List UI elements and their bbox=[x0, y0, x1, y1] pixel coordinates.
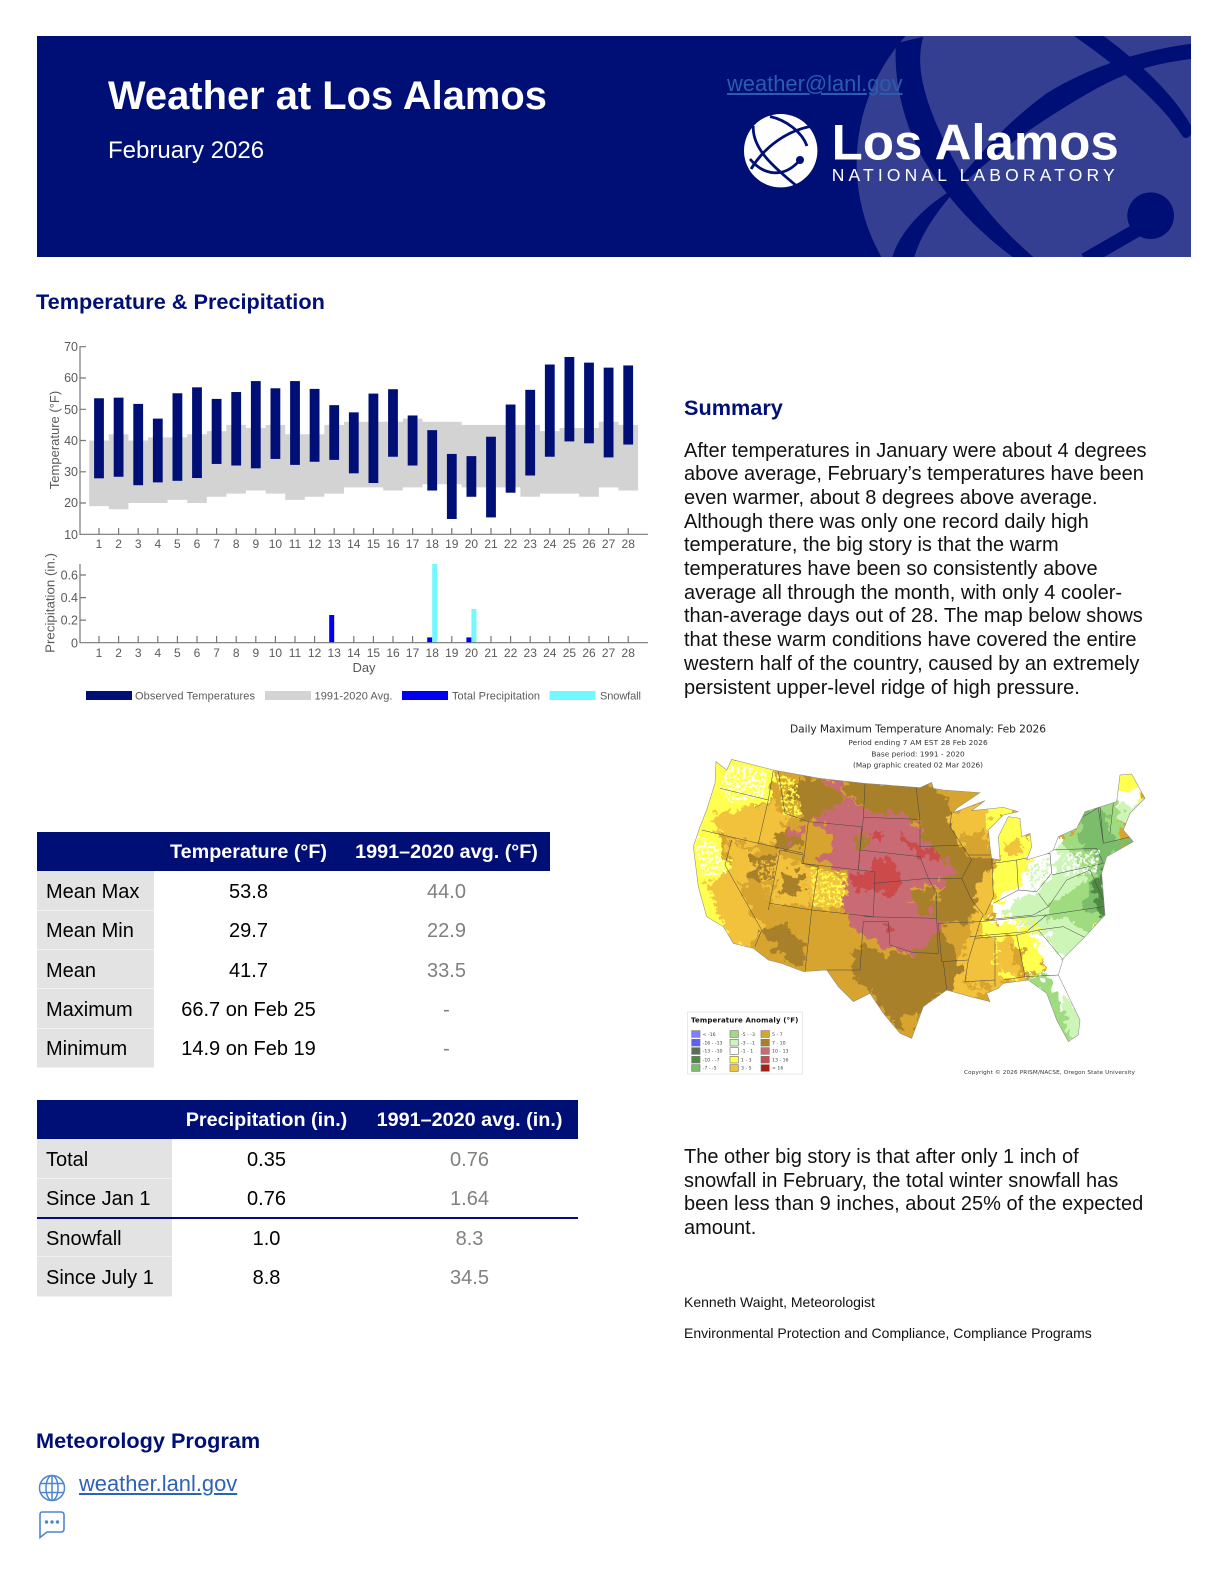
summary paragraph: than-average days out of 28. The map below shows bbox=[684, 605, 1143, 627]
banner background atom pattern bbox=[856, 36, 1191, 257]
chart legend: Observed Temperatures bbox=[135, 690, 256, 702]
icon: chat bubble bbox=[39, 1511, 65, 1539]
precipitation panel bbox=[42, 553, 648, 675]
summary paragraph: temperature, the big story is that the warm bbox=[684, 534, 1059, 556]
precipitation x labels: 15 bbox=[367, 646, 380, 660]
precipitation x labels: 16 bbox=[386, 646, 400, 660]
temperature x labels: 17 bbox=[406, 537, 420, 551]
table: precipitation statistics: 1.64 bbox=[450, 1188, 489, 1210]
precipitation x labels: 20 bbox=[465, 646, 478, 660]
state boundaries bbox=[702, 770, 1132, 990]
temperature x labels: 19 bbox=[445, 537, 459, 551]
temperature x labels: 25 bbox=[563, 537, 576, 551]
temperature x labels: 5 bbox=[174, 537, 181, 551]
precipitation y labels bbox=[61, 568, 78, 650]
map title: Daily Maximum Temperature Anomaly: Feb 2026 bbox=[790, 723, 1046, 736]
summary paragraph: western half of the country, caused by an extremely bbox=[684, 653, 1139, 675]
logo: Los Alamos National Laboratory bbox=[744, 114, 1119, 188]
table: temperature statistics: 22.9 bbox=[427, 920, 466, 942]
precipitation x labels: 6 bbox=[194, 646, 201, 660]
temperature x labels: 6 bbox=[194, 537, 201, 551]
table: precipitation statistics: Total bbox=[46, 1149, 88, 1171]
precipitation axes bbox=[80, 564, 648, 643]
precipitation x labels: 11 bbox=[289, 646, 302, 660]
precipitation x labels: 19 bbox=[445, 646, 459, 660]
table: temperature statistics: Mean bbox=[46, 960, 96, 982]
map legend: -16 - -13 bbox=[703, 1040, 723, 1046]
summary paragraph: even warmer, about 8 degrees above average. bbox=[684, 487, 1098, 509]
table: precipitation statistics: 1991–2020 avg. (in.) bbox=[377, 1109, 562, 1131]
precipitation x labels: 28 bbox=[622, 646, 635, 660]
summary paragraph: Although there was only one record daily high bbox=[684, 511, 1089, 533]
map legend: -10 - -7 bbox=[703, 1057, 720, 1063]
table: precipitation statistics: 0.35 bbox=[247, 1149, 286, 1171]
temperature x labels bbox=[96, 537, 635, 551]
chart legend bbox=[86, 690, 641, 702]
table: precipitation statistics: Snowfall bbox=[46, 1228, 122, 1250]
temperature x labels: 10 bbox=[269, 537, 282, 551]
summary paragraph: that these warm conditions have covered the entire bbox=[684, 629, 1136, 651]
temperature x labels: 27 bbox=[602, 537, 616, 551]
table: temperature statistics: Maximum bbox=[46, 999, 133, 1021]
temperature x labels: 2 bbox=[115, 537, 122, 551]
temperature x labels: 9 bbox=[252, 537, 259, 551]
map subtitle bbox=[848, 738, 988, 769]
logo subtitle: NATIONAL LABORATORY bbox=[832, 165, 1115, 185]
table: temperature statistics bbox=[37, 832, 550, 1068]
heading: temperature and precipitation: Temperature & Precipitation bbox=[36, 289, 325, 314]
temperature x labels: 24 bbox=[543, 537, 557, 551]
map subtitle: (Map graphic created 02 Mar 2026) bbox=[853, 760, 983, 769]
chart legend: Total Precipitation bbox=[452, 690, 540, 702]
map legend: 10 - 13 bbox=[772, 1049, 789, 1055]
temperature x labels: 16 bbox=[386, 537, 400, 551]
map legend: 7 - 10 bbox=[772, 1040, 786, 1046]
table: precipitation statistics: Since July 1 bbox=[46, 1267, 154, 1289]
map legend bbox=[687, 1012, 802, 1074]
temperature x labels: 15 bbox=[367, 537, 380, 551]
table: temperature statistics: Temperature (°F) bbox=[170, 841, 327, 863]
map legend: 13 - 16 bbox=[772, 1057, 789, 1063]
precipitation x labels: 13 bbox=[328, 646, 341, 660]
precipitation x labels: 24 bbox=[543, 646, 557, 660]
table: precipitation statistics: 0.76 bbox=[247, 1188, 286, 1210]
temperature y labels: 30 bbox=[64, 465, 78, 479]
average temperature band bbox=[89, 419, 638, 509]
map legend: > 16 bbox=[772, 1066, 783, 1072]
table: temperature statistics: - bbox=[443, 999, 450, 1021]
table: temperature statistics: Minimum bbox=[46, 1038, 127, 1060]
temperature x labels: 11 bbox=[289, 537, 302, 551]
temperature y labels: 50 bbox=[64, 403, 78, 417]
temperature x labels: 21 bbox=[484, 537, 498, 551]
temperature x labels: 14 bbox=[347, 537, 361, 551]
snowfall paragraph: amount. bbox=[684, 1217, 756, 1239]
summary paragraph: After temperatures in January were about 4 degrees bbox=[684, 440, 1146, 462]
temperature y labels bbox=[64, 340, 78, 542]
map legend: -1 - 1 bbox=[741, 1049, 753, 1055]
map: daily maximum temperature anomaly bbox=[687, 723, 1146, 1076]
snowfall paragraph: been less than 9 inches, about 25% of the expected bbox=[684, 1193, 1143, 1215]
map legend: 3 - 5 bbox=[741, 1066, 752, 1072]
precipitation x labels: 18 bbox=[426, 646, 439, 660]
heading: meteorology program: Meteorology Program bbox=[36, 1428, 260, 1452]
subtitle date: February 2026 bbox=[108, 137, 264, 164]
precipitation x labels: 21 bbox=[484, 646, 498, 660]
precipitation x labels: 26 bbox=[582, 646, 596, 660]
map copyright: Copyright © 2026 PRISM/NACSE, Oregon State University bbox=[964, 1069, 1136, 1076]
precipitation x labels: 23 bbox=[524, 646, 537, 660]
chart legend: Snowfall bbox=[600, 690, 641, 702]
temperature y labels: 60 bbox=[64, 371, 78, 385]
summary paragraph bbox=[684, 440, 1146, 699]
temperature y labels: 10 bbox=[64, 528, 78, 542]
total precipitation bars bbox=[329, 615, 471, 643]
table: precipitation statistics: 1.0 bbox=[253, 1228, 280, 1250]
heading: summary: Summary bbox=[684, 394, 783, 420]
header banner bbox=[37, 36, 1191, 257]
table: temperature statistics: 1991–2020 avg. (°F) bbox=[355, 841, 538, 863]
temperature y labels: 40 bbox=[64, 434, 78, 448]
precipitation x labels: 3 bbox=[135, 646, 142, 660]
map legend: 1 - 3 bbox=[741, 1057, 752, 1063]
temperature x labels: 18 bbox=[426, 537, 439, 551]
temperature y labels: 70 bbox=[64, 340, 78, 354]
map legend: 5 - 7 bbox=[772, 1032, 783, 1038]
precipitation x labels: 5 bbox=[174, 646, 181, 660]
temperature x labels: 22 bbox=[504, 537, 518, 551]
temperature x labels: 20 bbox=[465, 537, 478, 551]
precipitation y labels: 0 bbox=[71, 636, 78, 650]
table: temperature statistics: 66.7 on Feb 25 bbox=[181, 999, 316, 1021]
precipitation x labels: 25 bbox=[563, 646, 576, 660]
icon: globe bbox=[38, 1474, 66, 1502]
temperature x labels: 1 bbox=[96, 537, 103, 551]
summary paragraph: temperatures have been so consistently above bbox=[684, 558, 1098, 580]
map subtitle: Base period: 1991 - 2020 bbox=[871, 749, 965, 758]
table: precipitation statistics: 8.3 bbox=[456, 1228, 483, 1250]
map subtitle: Period ending 7 AM EST 28 Feb 2026 bbox=[848, 738, 988, 747]
map legend: -7 - -5 bbox=[703, 1066, 717, 1072]
table: temperature statistics: 14.9 on Feb 19 bbox=[181, 1038, 316, 1060]
precipitation x labels: 10 bbox=[269, 646, 282, 660]
temperature x labels: 4 bbox=[154, 537, 161, 551]
temperature panel bbox=[47, 340, 648, 551]
precipitation x labels: 1 bbox=[96, 646, 103, 660]
email link: weather@lanl.gov bbox=[727, 71, 903, 96]
author: Kenneth Waight, Meteorologist bbox=[684, 1294, 875, 1310]
temperature x labels: 7 bbox=[213, 537, 220, 551]
logo globe bbox=[744, 114, 817, 187]
table: precipitation statistics: 0.76 bbox=[450, 1149, 489, 1171]
map legend: Temperature Anomaly (°F) bbox=[691, 1016, 798, 1024]
precipitation x labels bbox=[96, 646, 635, 660]
precipitation y labels: 0.2 bbox=[61, 614, 78, 628]
summary paragraph: persistent upper-level ridge of high pressure. bbox=[684, 677, 1080, 699]
snowfall paragraph bbox=[684, 1146, 1143, 1239]
table: precipitation statistics bbox=[37, 1100, 578, 1297]
temperature x labels: 26 bbox=[582, 537, 596, 551]
snowfall bars bbox=[432, 564, 476, 643]
table: temperature statistics: 29.7 bbox=[229, 920, 268, 942]
temperature x labels: 12 bbox=[308, 537, 322, 551]
precipitation x labels: 8 bbox=[233, 646, 240, 660]
precipitation x labels: 22 bbox=[504, 646, 518, 660]
table: temperature statistics: 53.8 bbox=[229, 881, 268, 903]
precipitation y labels: 0.4 bbox=[61, 591, 78, 605]
table: precipitation statistics: Precipitation (in.) bbox=[186, 1109, 347, 1131]
table: temperature statistics: Mean Min bbox=[46, 920, 134, 942]
table: temperature statistics: 33.5 bbox=[427, 960, 466, 982]
table: precipitation statistics: Since Jan 1 bbox=[46, 1188, 151, 1210]
temperature axes bbox=[80, 347, 648, 534]
precipitation x labels: 7 bbox=[213, 646, 220, 660]
temperature x labels: 23 bbox=[524, 537, 537, 551]
precipitation y labels: 0.6 bbox=[61, 568, 78, 582]
temperature y labels: 20 bbox=[64, 496, 78, 510]
temperature x labels: 13 bbox=[328, 537, 341, 551]
precipitation x labels: 12 bbox=[308, 646, 322, 660]
table: temperature statistics: 41.7 bbox=[229, 960, 268, 982]
speckled texture patches bbox=[692, 763, 1100, 943]
chart: daily temperature and precipitation bbox=[42, 340, 648, 702]
snowfall paragraph: The other big story is that after only 1 inch of bbox=[684, 1146, 1079, 1168]
temperature x labels: 28 bbox=[622, 537, 635, 551]
chart legend: 1991-2020 Avg. bbox=[314, 690, 392, 702]
snowfall paragraph: snowfall in February, the total winter snowfall has bbox=[684, 1170, 1118, 1192]
title: Weather at Los Alamos bbox=[108, 74, 547, 118]
temperature x labels: 8 bbox=[233, 537, 240, 551]
summary paragraph: average all through the month, with only 4 cooler- bbox=[684, 582, 1122, 604]
precipitation axis title: Precipitation (in.) bbox=[42, 553, 58, 653]
affiliation: Environmental Protection and Compliance, Compliance Programs bbox=[684, 1325, 1092, 1341]
temperature x labels: 3 bbox=[135, 537, 142, 551]
table: temperature statistics: - bbox=[443, 1038, 450, 1060]
observed temperature bars bbox=[94, 357, 633, 519]
day axis title: Day bbox=[352, 660, 376, 675]
table: temperature statistics: Mean Max bbox=[46, 881, 139, 903]
precipitation x labels: 14 bbox=[347, 646, 361, 660]
precipitation x labels: 4 bbox=[154, 646, 161, 660]
precipitation x labels: 2 bbox=[115, 646, 122, 660]
summary paragraph: above average, February’s temperatures have been bbox=[684, 463, 1144, 485]
temperature axis title: Temperature (°F) bbox=[47, 391, 62, 489]
table: precipitation statistics: 8.8 bbox=[253, 1267, 280, 1289]
map legend: -3 - -1 bbox=[741, 1040, 755, 1046]
logo wordmark: Los Alamos bbox=[832, 114, 1119, 170]
map legend: -13 - -10 bbox=[703, 1049, 723, 1055]
website link: weather.lanl.gov bbox=[79, 1471, 237, 1496]
precipitation x labels: 27 bbox=[602, 646, 616, 660]
map outline bbox=[693, 759, 1145, 1042]
table: precipitation statistics: 34.5 bbox=[450, 1267, 489, 1289]
table: temperature statistics: 44.0 bbox=[427, 881, 466, 903]
temperature anomaly map of the contiguous United States bbox=[683, 750, 1150, 1050]
precipitation x labels: 17 bbox=[406, 646, 420, 660]
precipitation x labels: 9 bbox=[252, 646, 259, 660]
map legend: -5 - -3 bbox=[741, 1032, 755, 1038]
map legend: < -16 bbox=[703, 1032, 716, 1038]
